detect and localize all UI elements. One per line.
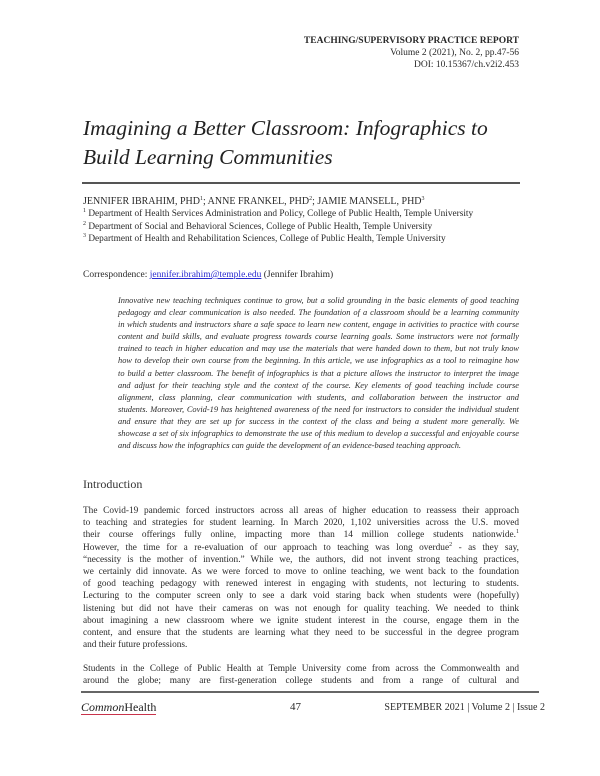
abstract: students. Moreover, Covid-19 has heightened awareness of the need for instructors to consider the individual student <box>118 405 519 414</box>
body paragraph 2 <box>83 664 519 686</box>
abstract: in which students and instructors share a safe space to learn new content, engage in activities to practice with course <box>118 320 519 329</box>
title rule <box>82 182 520 184</box>
authors and affiliations: JENNIFER IBRAHIM, PHD1; ANNE FRANKEL, PHD2; JAMIE MANSELL, PHD3 <box>83 196 425 207</box>
abstract: showcase a set of six infographics to demonstrate the use of this medium to develop a successful and enjoyable course <box>118 429 519 438</box>
authors and affiliations: 2 Department of Social and Behavioral Sciences, College of Public Health, Temple University <box>83 221 432 232</box>
abstract: and discuss how the infographics can guide the development of an evidence-based teaching approach. <box>118 441 461 450</box>
abstract: pedagogy and clear communication is also needed. The foundation of a classroom should be a learning community <box>118 308 519 317</box>
heading: introduction: Introduction <box>83 477 142 491</box>
header: journal info <box>304 36 519 70</box>
body paragraph 1: The Covid-19 pandemic forced instructors across all areas of higher education to reassess their approach <box>83 506 519 516</box>
abstract: trained to teach in higher education and may use the materials that were handed down to them, but not truly know <box>118 344 519 353</box>
abstract: and adjust for their teaching style and the context of the course. Key elements of good teaching include course <box>118 381 519 390</box>
footer: logo: CommonHealth <box>81 700 156 714</box>
title: Build Learning Communities <box>83 145 333 169</box>
body paragraph 1 <box>83 506 519 650</box>
body paragraph 1: of good teaching pedagogy with renewed interest in engaging with students, not lecturing to students. <box>83 579 519 589</box>
header: journal info: DOI: 10.15367/ch.v2i2.453 <box>414 60 519 70</box>
body paragraph 2: Students in the College of Public Health at Temple University come from across the Commonwealth and <box>83 664 519 674</box>
authors and affiliations <box>83 196 474 244</box>
abstract: how to develop their own course from the beginning. In this article, we use infographics as a tool to reimagine how <box>118 356 519 365</box>
abstract: alignment, class planning, clear communication with students, and collaboration between the instructor and <box>118 393 519 402</box>
abstract <box>118 296 520 450</box>
correspondence: Correspondence: jennifer.ibrahim@temple.edu (Jennifer Ibrahim) <box>83 270 333 280</box>
title: Imagining a Better Classroom: Infographics to <box>83 116 488 140</box>
abstract: and ensure that they are set up for success in the context of the class and being a student more generally. We <box>118 417 519 426</box>
body paragraph 1: their course offerings fully online, impacting more than 14 million college students nationwide.1 <box>83 529 519 540</box>
body paragraph 1: listening but did not have their cameras on was not enough for quality teaching. We needed to think <box>83 604 519 614</box>
body paragraph 2: around the globe; many are first-generation college students and from a range of cultural and <box>83 676 519 686</box>
footer rule <box>81 691 539 693</box>
header: journal info: TEACHING/SUPERVISORY PRACTICE REPORT <box>304 36 519 46</box>
header: journal info: Volume 2 (2021), No. 2, pp.47-56 <box>390 48 519 58</box>
body paragraph 1: about imagining a new classroom where we ignite student interest in the course, engage them in the <box>83 616 519 626</box>
abstract: content and build skills, and evaluate progress towards course learning goals. Some instructors were not formally <box>118 332 519 341</box>
body paragraph 1: Lecturing to the computer screen only to see a dark void staring back when students were (hopefully) <box>83 591 519 601</box>
abstract: Innovative new teaching techniques continue to grow, but a solid grounding in the basic elements of good teaching <box>118 296 519 305</box>
authors and affiliations: 3 Department of Health and Rehabilitation Sciences, College of Public Health, Temple University <box>83 233 446 244</box>
authors and affiliations: 1 Department of Health Services Administration and Policy, College of Public Health, Temple University <box>83 208 473 219</box>
body paragraph 1: to teaching and strategies for student learning. In March 2020, 1,102 universities across the U.S. moved <box>83 518 519 528</box>
body paragraph 1: content, and ensure that the students are learning what they need to be successful in the degree program <box>83 628 519 638</box>
body paragraph 1: “necessity is the mother of invention.” While we, the authors, did not invent strong teaching practices, <box>83 555 519 565</box>
body paragraph 1: However, the time for a re-evaluation of our approach to teaching was long overdue2 - as they say, <box>83 542 519 553</box>
footer: issue info: SEPTEMBER 2021 | Volume 2 | Issue 2 <box>384 702 545 713</box>
body paragraph 1: we certainly did innovate. As we were forced to move to online teaching, we went back to the foundation <box>83 567 519 577</box>
footer: page number: 47 <box>290 701 301 713</box>
title <box>82 116 488 169</box>
abstract: to build a better classroom. The benefit of infographics is that a picture allows the instructor to interpret the image <box>118 369 519 378</box>
body paragraph 1: and their future professions. <box>83 640 187 650</box>
